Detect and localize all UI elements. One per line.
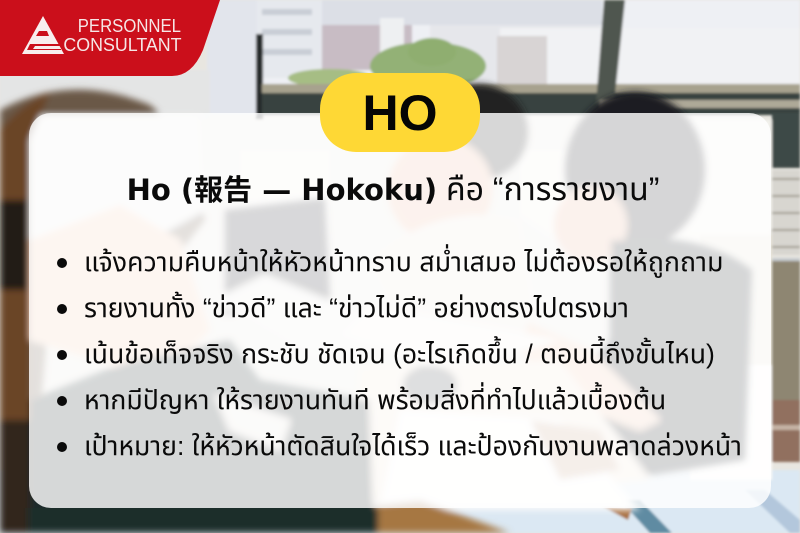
laptop (225, 198, 330, 315)
banner shape (0, 0, 220, 76)
translucent content panel (29, 113, 771, 508)
bullet list (57, 244, 742, 461)
logo text: PERSONNEL (78, 16, 181, 36)
bullet 2: รายงานทั้ง “ข่าวดี” และ “ข่าวไม่ดี” อย่างตรงไปตรงมา (84, 293, 629, 323)
woman right (565, 92, 705, 248)
logo banner (0, 0, 220, 76)
woman with glasses (428, 84, 528, 180)
bullet 1: แจ้งความคืบหน้าให้หัวหน้าทราบ สม่ำเสมอ ไม่ต้องรอให้ถูกถาม (84, 247, 724, 277)
yellow HO badge (320, 73, 480, 152)
icon: logo triangle (22, 16, 64, 54)
bullet 5: เป้าหมาย: ให้หัวหน้าตัดสินใจได้เร็ว และป้องกันงานพลาดล่วงหน้า (84, 431, 742, 461)
bullet 3: เน้นข้อเท็จจริง กระชับ ชัดเจน (อะไรเกิดขึ้น / ตอนนี้ถึงขั้นไหน) (84, 339, 715, 369)
heading: Ho (報告 — Hokoku) คือ “การรายงาน” (127, 171, 659, 207)
yellow HO badge: HO (362, 85, 438, 141)
logo text: CONSULTANT (63, 35, 182, 55)
logo text (63, 16, 182, 55)
table items (350, 360, 650, 505)
foreground woman (0, 90, 205, 533)
bullet 4: หากมีปัญหา ให้รายงานทันที พร้อมสิ่งที่ทำไปแล้วเบื้องต้น (84, 385, 666, 415)
